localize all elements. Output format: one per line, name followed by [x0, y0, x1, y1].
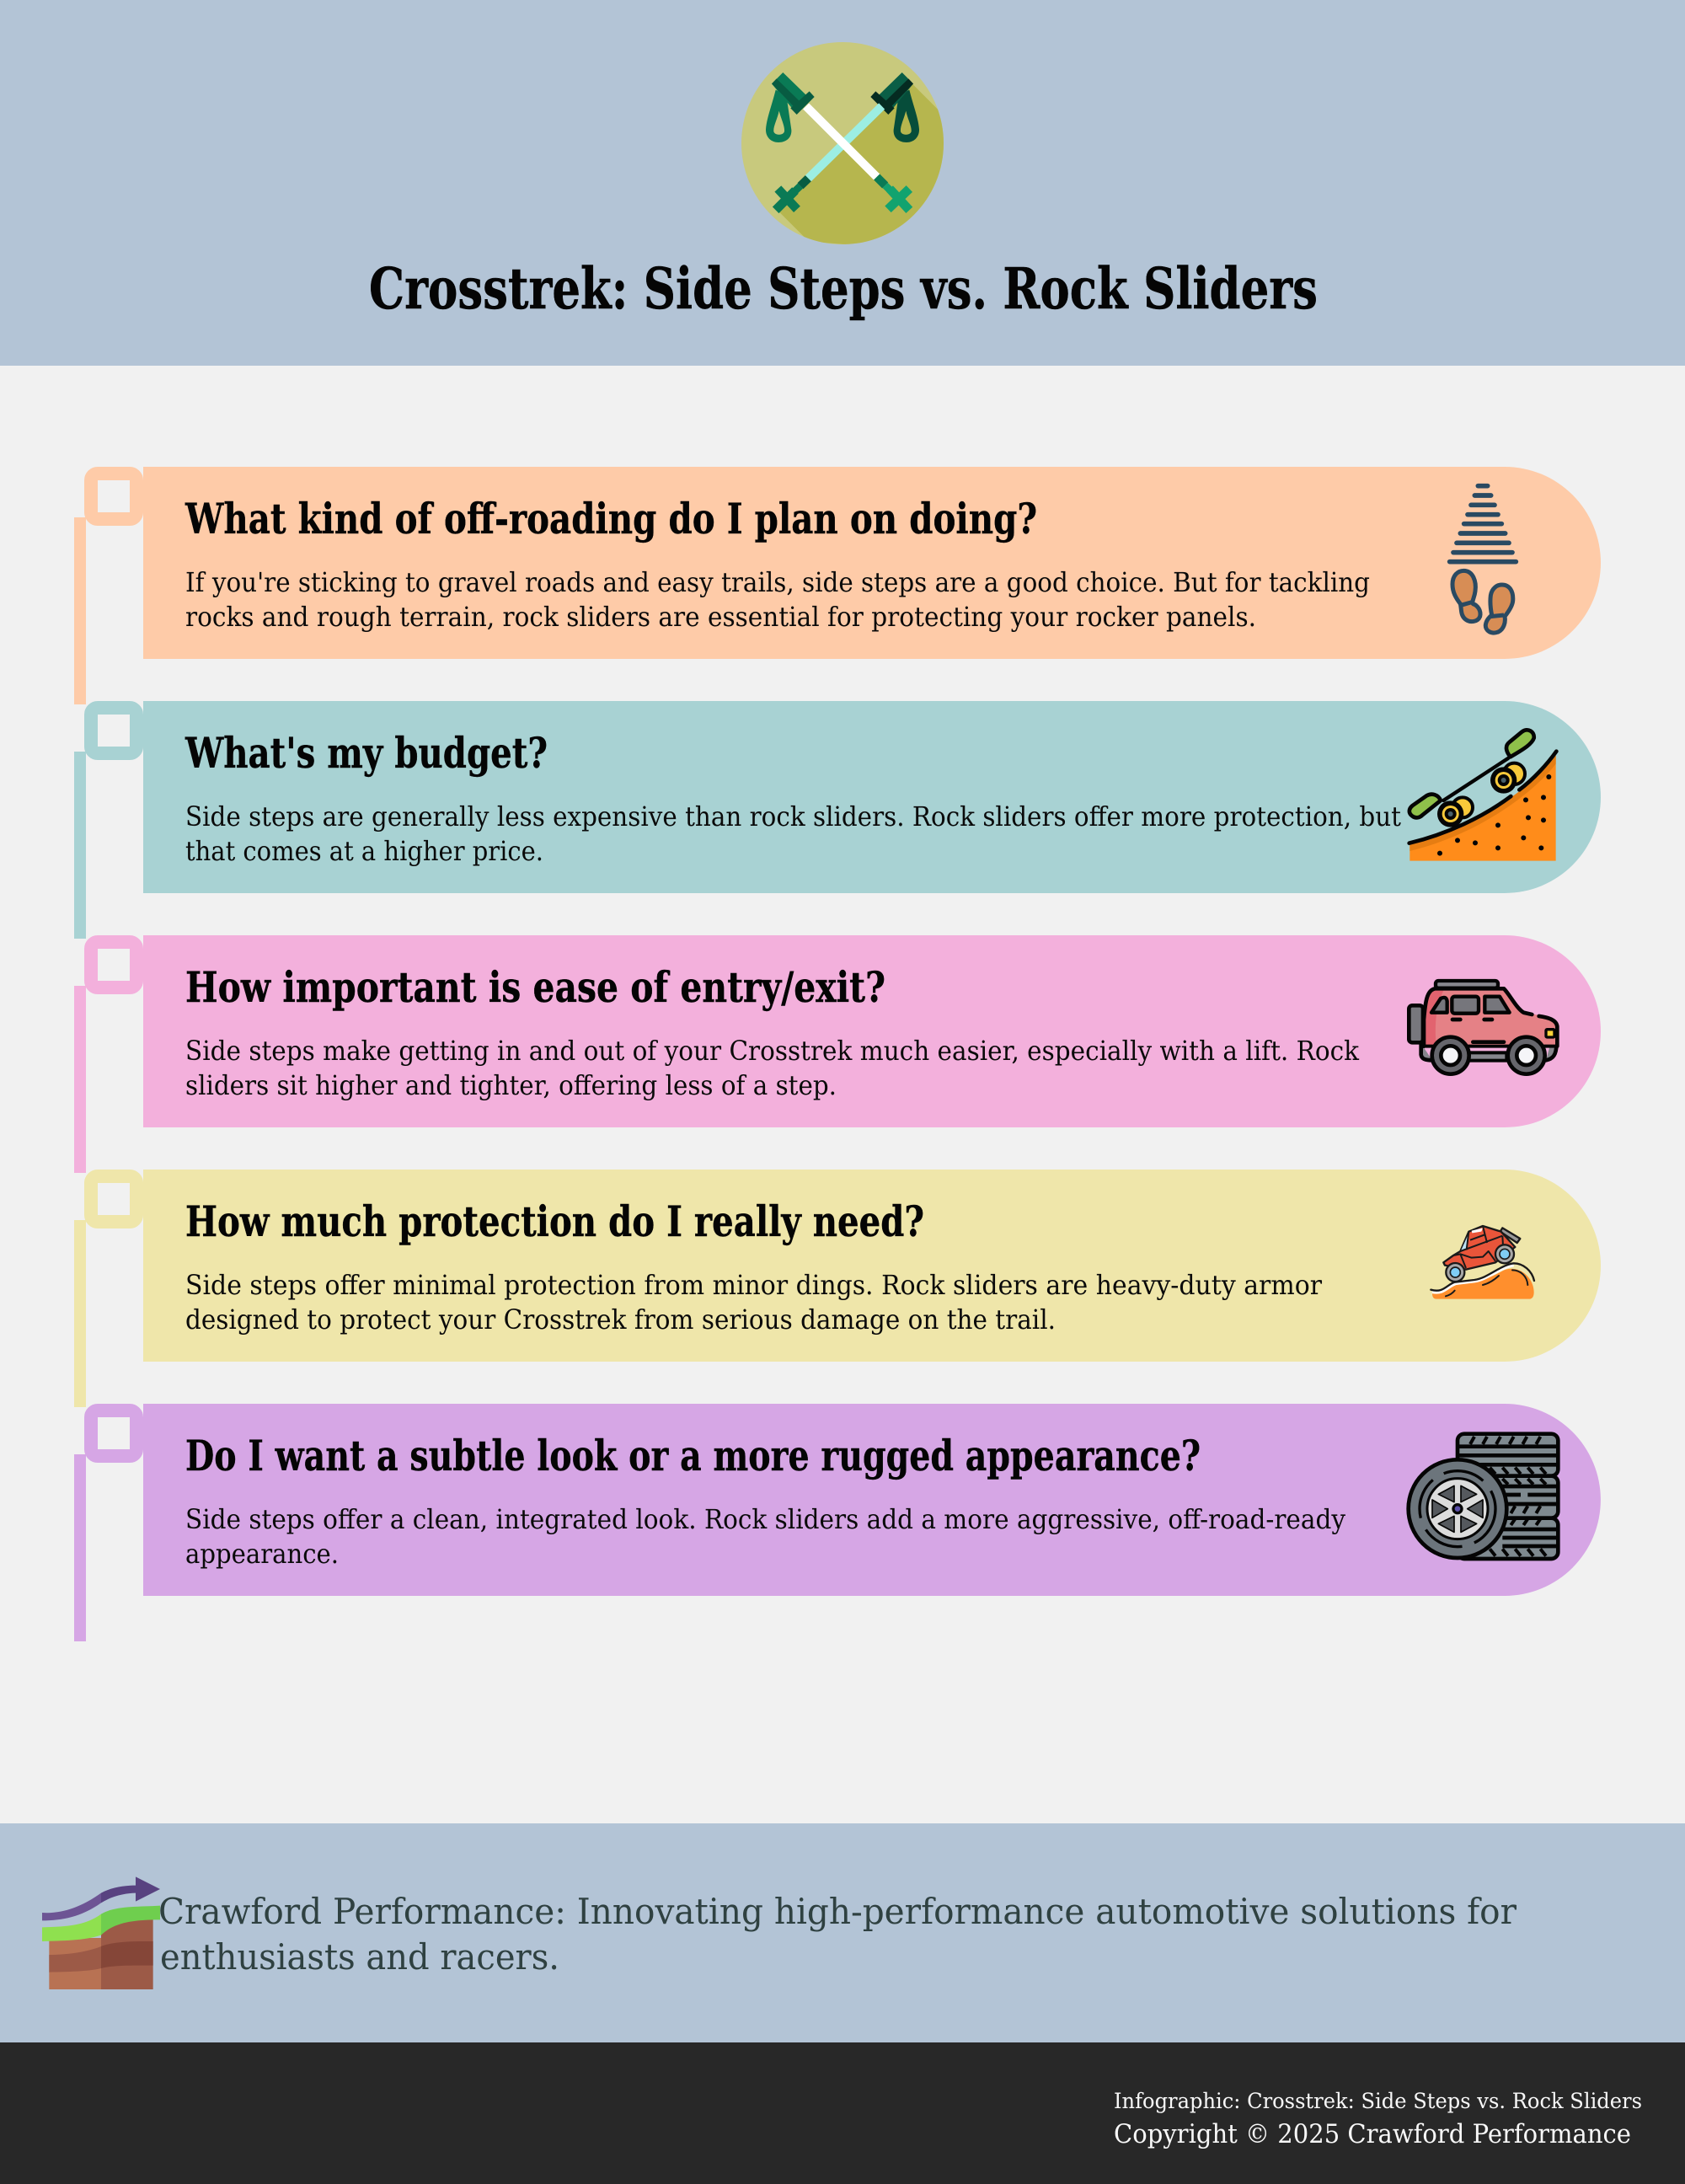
timeline bar: [74, 517, 86, 704]
icon: buggy on a dune: [1431, 1226, 1534, 1299]
copyright text: Infographic: Crosstrek: Side Steps vs. Rock Sliders: [1114, 2089, 1642, 2113]
card background: [143, 1170, 1601, 1362]
body text: [185, 1036, 1360, 1101]
footer tagline: enthusiasts and racers.: [160, 1936, 559, 1978]
heading: How much protection do I really need?: [185, 1196, 924, 1246]
header band: [0, 0, 1685, 366]
marker square: [91, 942, 136, 988]
card background: [143, 701, 1601, 893]
body text: Side steps offer minimal protection from minor dings. Rock sliders are heavy-duty armor: [185, 1271, 1323, 1301]
footer tagline: [158, 1891, 1517, 1978]
body text: Side steps make getting in and out of your Crosstrek much easier, especially with a lift. Rock: [185, 1036, 1360, 1067]
marker square: [91, 1410, 136, 1456]
body text: [185, 802, 1401, 867]
heading: Do I want a subtle look or a more rugged appearance?: [185, 1431, 1201, 1480]
timeline bar: [74, 752, 86, 939]
body text: Side steps offer a clean, integrated look. Rock sliders add a more aggressive, off-road-ready: [185, 1505, 1345, 1535]
body text: sliders sit higher and tighter, offering less of a step.: [185, 1071, 837, 1101]
copyright text: [1114, 2089, 1642, 2149]
body text: Side steps are generally less expensive than rock sliders. Rock sliders offer more protection, but: [185, 802, 1401, 832]
body text: appearance.: [185, 1539, 339, 1570]
card background: [143, 1404, 1601, 1596]
panel: budget question: [74, 701, 1601, 939]
panel: ease of entry question: [74, 935, 1601, 1173]
body text: [185, 1505, 1345, 1570]
body text: rocks and rough terrain, rock sliders are essential for protecting your rocker panels.: [185, 602, 1256, 633]
footer band: [0, 1823, 1685, 2042]
card background: [143, 467, 1601, 659]
panel: off-roading question: [74, 467, 1601, 704]
copyright text: Copyright © 2025 Crawford Performance: [1114, 2119, 1631, 2149]
body text: [185, 1271, 1323, 1336]
body text: designed to protect your Crosstrek from serious damage on the trail.: [185, 1305, 1056, 1336]
timeline bar: [74, 1220, 86, 1407]
icon: red SUV: [1409, 981, 1557, 1074]
icon: tire stack: [1409, 1434, 1558, 1559]
card background: [143, 935, 1601, 1127]
icon: terrain layers with arrow: [42, 1876, 160, 1989]
copyright bar: [0, 2042, 1685, 2184]
marker square: [91, 1176, 136, 1222]
marker square: [91, 474, 136, 519]
timeline bar: [74, 1454, 86, 1641]
icon: steps and footprints: [1450, 486, 1516, 633]
footer tagline: Crawford Performance: Innovating high-performance automotive solutions for: [158, 1891, 1517, 1932]
icon: crossed hiking poles logo: [741, 42, 955, 253]
heading: What kind of off-roading do I plan on doing?: [185, 494, 1037, 543]
panel: protection question: [74, 1170, 1601, 1407]
timeline bar: [74, 986, 86, 1173]
panel: look question: [74, 1404, 1601, 1641]
body text: that comes at a higher price.: [185, 837, 543, 867]
icon: skateboard on a hill: [1410, 730, 1556, 861]
heading: How important is ease of entry/exit?: [185, 962, 885, 1012]
body text: [185, 568, 1370, 633]
body text: If you're sticking to gravel roads and easy trails, side steps are a good choice. But for tackling: [185, 568, 1370, 598]
title: Crosstrek: Side Steps vs. Rock Sliders: [369, 255, 1318, 322]
heading: What's my budget?: [185, 728, 548, 778]
marker square: [91, 708, 136, 753]
